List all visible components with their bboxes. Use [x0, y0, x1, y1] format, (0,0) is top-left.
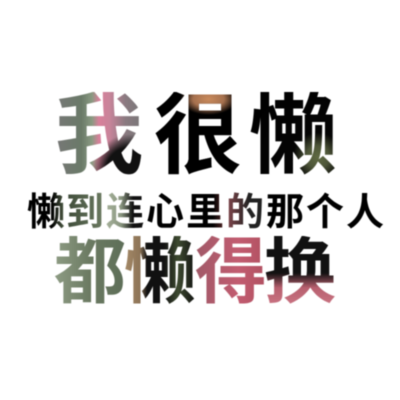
character: 连: 连 — [106, 192, 144, 234]
character: 换 black top, pink bottom: 换 — [264, 233, 336, 313]
subheading line: 懒到连心里的那个人 — [27, 192, 384, 234]
character: 懒: 懒 — [27, 192, 65, 234]
character: 人: 人 — [346, 192, 384, 234]
character: 那: 那 — [266, 192, 304, 234]
character: 的: 的 — [226, 192, 264, 234]
character: 心: 心 — [146, 192, 184, 234]
character: 个: 个 — [306, 192, 344, 234]
closing line: 都懒得换 — [54, 233, 336, 313]
character: 里: 里 — [186, 192, 224, 234]
character: 懒 dark with green corner: 懒 — [249, 86, 337, 185]
character: 都 green: 都 — [54, 233, 126, 313]
character: 到: 到 — [66, 192, 104, 234]
character: 得 red: 得 — [195, 233, 267, 313]
headline line: 我很懒 — [57, 86, 337, 185]
character: 懒 brown and black: 懒 — [124, 233, 196, 313]
